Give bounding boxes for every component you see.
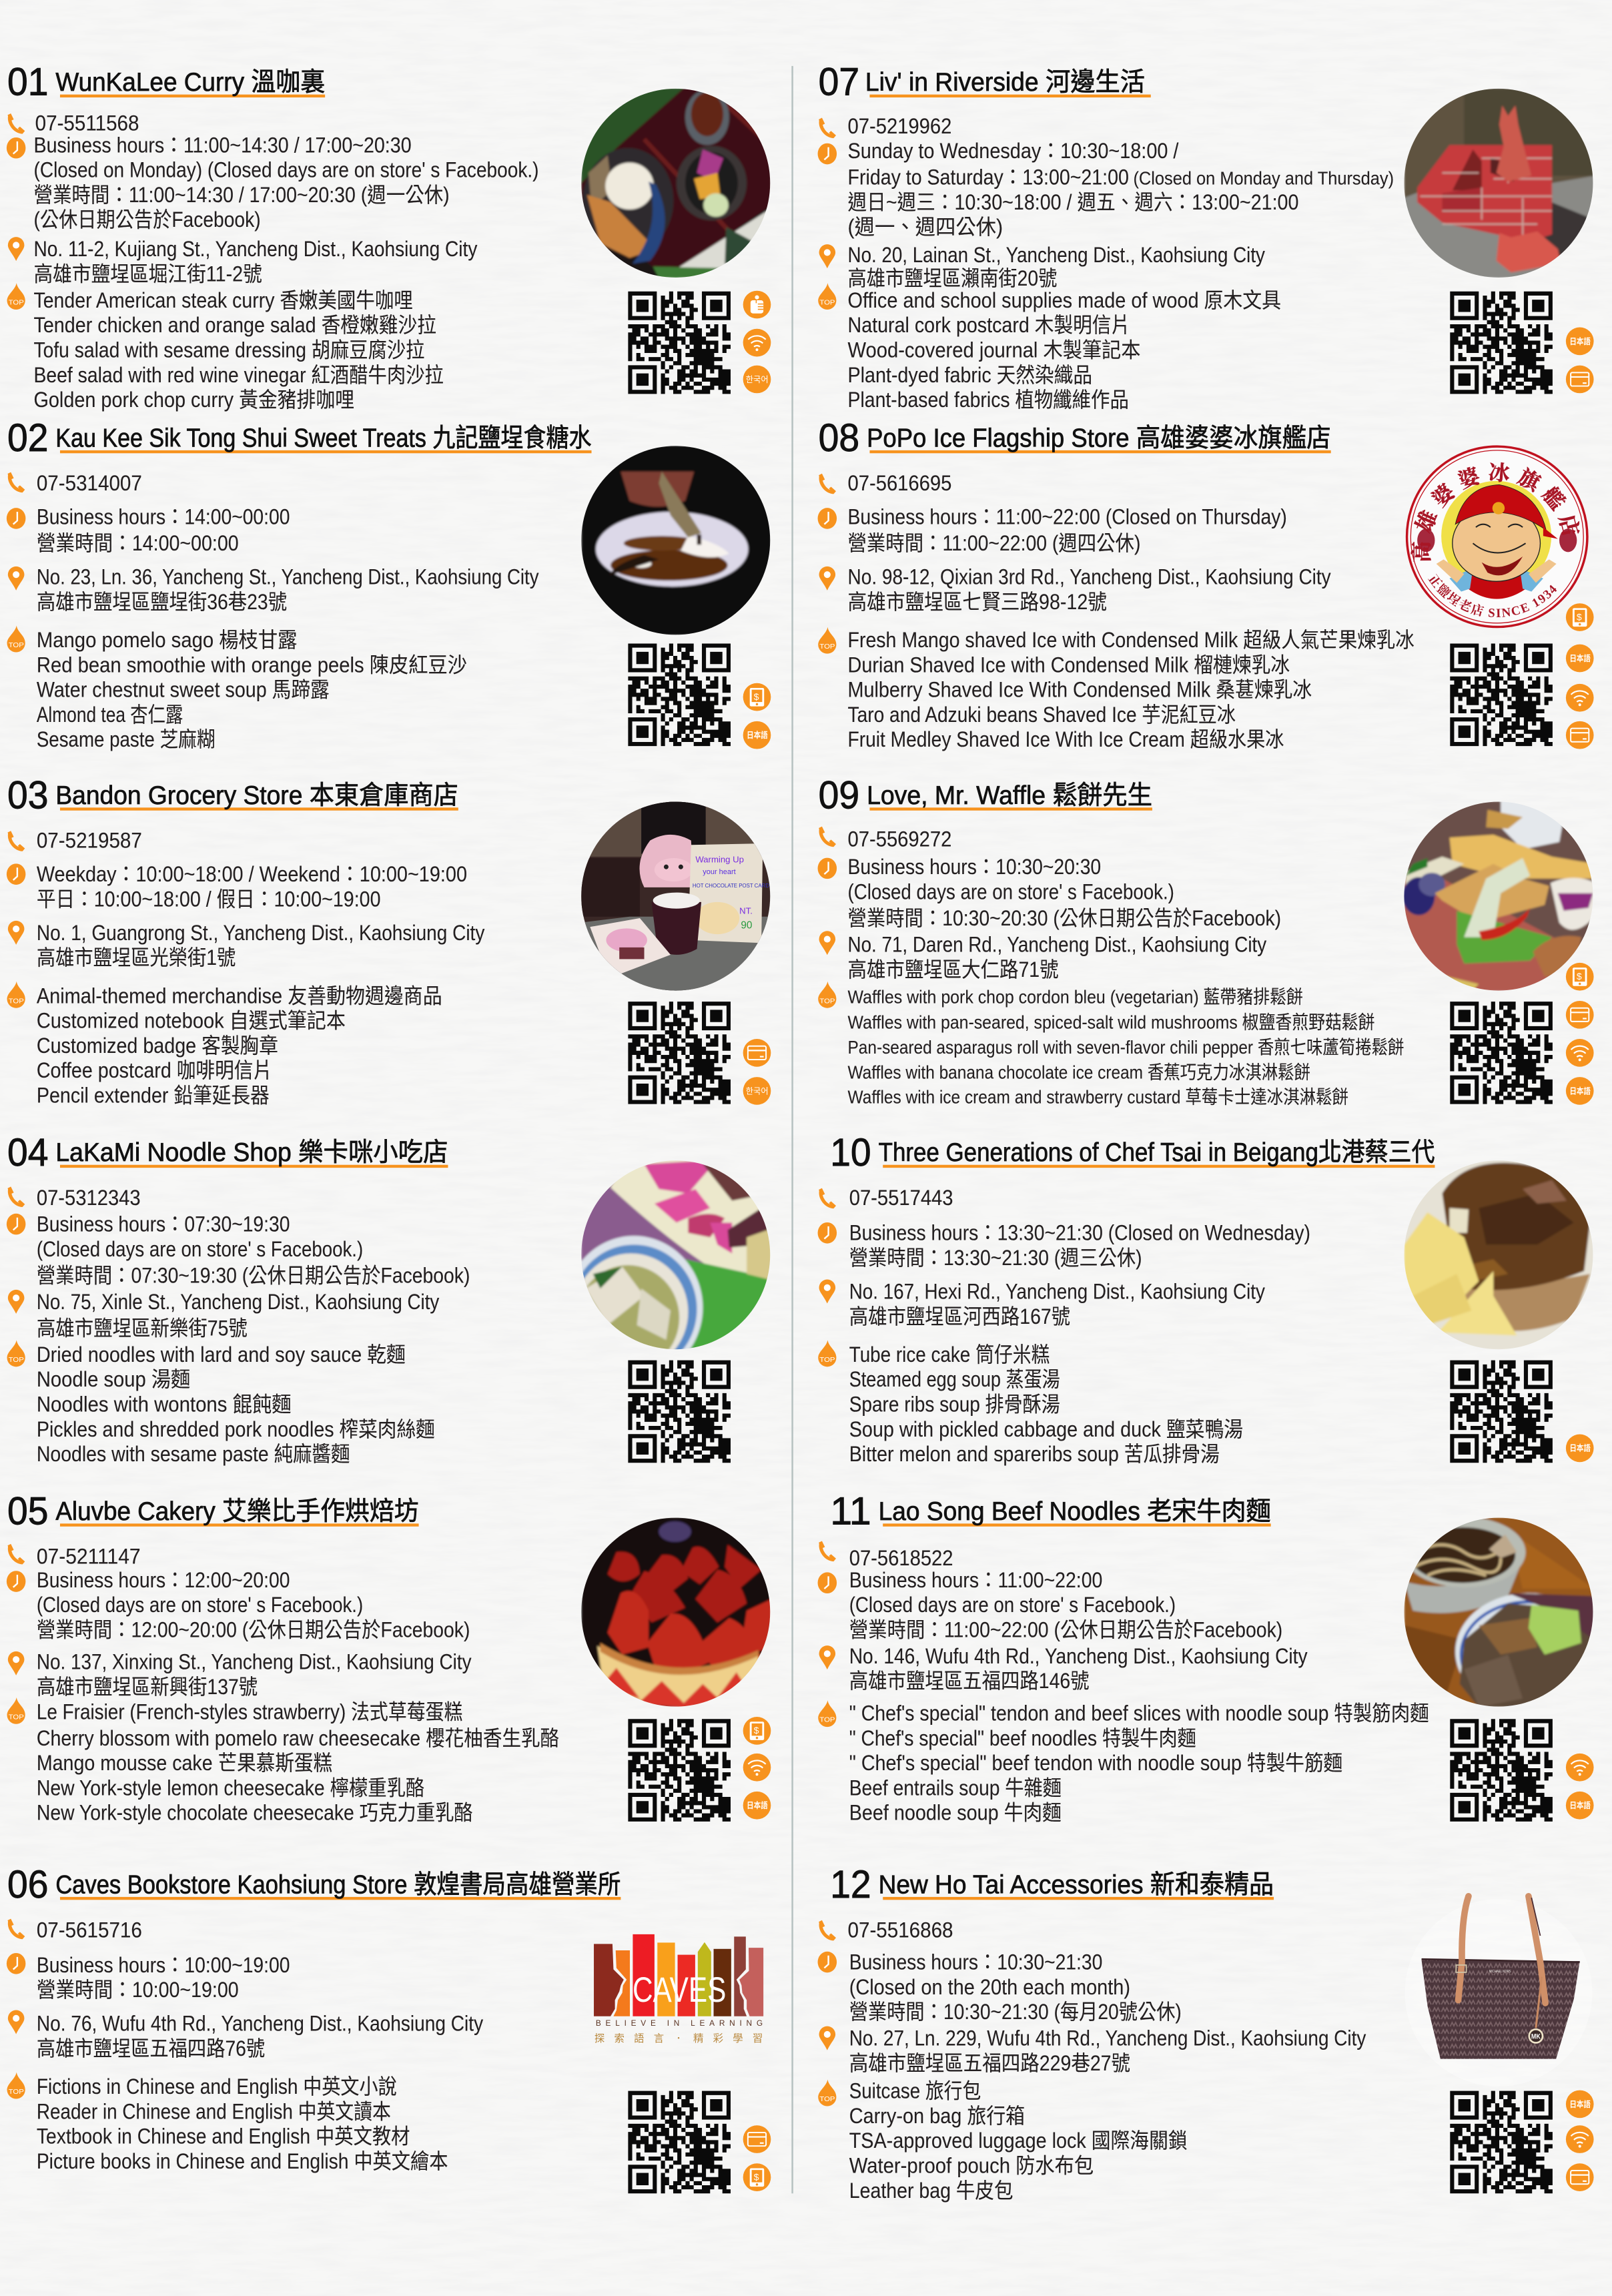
photo: tube rice cake [1404, 1160, 1595, 1350]
top items: New York-style chocolate cheesecake 巧克力重乳酪 [37, 1801, 473, 1825]
address: No. 20, Lainan St., Yancheng Dist., Kaohsiung City [848, 243, 1265, 267]
address: 高雄市鹽埕區堀江街11-2號 [33, 262, 262, 286]
centre divider [791, 66, 793, 2193]
top items: TOP [9, 2088, 24, 2096]
top items [7, 1340, 435, 1466]
address: No. 137, Xinxing St., Yancheng Dist., Kaohsiung City [37, 1650, 472, 1674]
heading 03: 03 [7, 773, 48, 817]
logo: CAVES: CAVES [633, 1970, 726, 2010]
heading 11 [830, 1489, 1271, 1533]
top items: " Chef's special" beef noodles 特製牛肉麵 [849, 1726, 1196, 1750]
logo: CAVES: BELIEVE IN LEARNING [596, 2018, 763, 2028]
business hours: Friday to Saturday：13:00~21:00 [848, 165, 1129, 189]
top items [7, 982, 442, 1107]
qr code [628, 2091, 731, 2193]
business hours [7, 505, 290, 555]
heading 03: Bandon Grocery Store 本東倉庫商店 [55, 781, 458, 810]
heading 06: 06 [7, 1863, 48, 1906]
address [819, 931, 1266, 982]
top items: Customized badge 客製胸章 [37, 1034, 278, 1058]
photo: pig plush and hot chocolate: NT. [739, 905, 753, 915]
service badges [743, 291, 771, 393]
business hours [818, 139, 1394, 239]
heading 08 [819, 416, 1331, 460]
heading 01: 01 [7, 61, 48, 104]
top items [7, 626, 467, 751]
address [819, 243, 1265, 290]
top items: Pan-seared asparagus roll with seven-flavor chili pepper 香煎七味蘆筍捲鬆餅 [848, 1037, 1404, 1058]
panel: 02 Kau Kee Sik [7, 416, 771, 751]
phone: 07-5211147 [37, 1545, 141, 1569]
top items [7, 2072, 448, 2173]
photo: leather handbag [1404, 1896, 1592, 2086]
business hours: Business hours：12:00~20:00 [37, 1568, 290, 1592]
business hours: 營業時間：12:00~20:00 (公休日期公告於Facebook) [37, 1617, 470, 1641]
phone: 07-5219962 [848, 114, 951, 138]
top items: Fruit Medley Shaved Ice With Ice Cream 超級水果冰 [848, 727, 1284, 751]
top items [818, 627, 1415, 751]
top items: Waffles with ice cream and strawberry custard 草莓卡士達冰淇淋鬆餅 [848, 1087, 1348, 1108]
address: 高雄市鹽埕區瀨南街20號 [848, 266, 1057, 290]
qr code [1450, 292, 1553, 394]
business hours: (公休日期公告於Facebook) [33, 208, 261, 232]
heading 05: 05 [7, 1489, 48, 1533]
heading 10 [830, 1131, 1435, 1174]
business hours [7, 862, 467, 911]
address [8, 2010, 483, 2060]
panel: 07 Liv in Riverside [818, 61, 1595, 412]
panel: 12 New Ho Tai [818, 1863, 1594, 2203]
logo: PoPo Ice grandma: 高雄婆婆冰旗艦店 [1410, 462, 1580, 562]
photo: pig plush and hot chocolate: your heart [703, 868, 736, 876]
business hours [818, 1950, 1182, 2024]
photo: beef noodles [1402, 1517, 1602, 1710]
heading 04: 04 [7, 1131, 48, 1174]
service badges: 한국어 [746, 375, 769, 384]
heading 02 [7, 416, 592, 460]
panel: 05 Aluvbe Cakery [7, 1489, 771, 1825]
business hours: (Closed on Monday and Thursday) [1133, 168, 1394, 189]
top items: TOP [9, 998, 24, 1005]
top items: TOP [819, 1717, 835, 1724]
heading 09: 09 [819, 773, 859, 817]
business hours [818, 1568, 1282, 1641]
address [8, 921, 484, 970]
service badges: 日本語 [1569, 336, 1591, 346]
top items: Almond tea 杏仁露 [37, 703, 183, 727]
service badges: 日本語 [1569, 1086, 1591, 1096]
address [8, 237, 477, 286]
top items: Office and school supplies made of wood 原木文具 [848, 288, 1281, 312]
top items [818, 1700, 1429, 1825]
service badges [1566, 2090, 1594, 2191]
business hours: 週日~週三：10:30~18:00 / 週五、週六：13:00~21:00 [848, 190, 1298, 214]
address [819, 565, 1331, 614]
top items: TOP [9, 642, 24, 649]
address [819, 1280, 1265, 1328]
photo: pig plush and hot chocolate: 90 [741, 919, 752, 931]
phone [819, 1541, 953, 1570]
address [8, 1650, 472, 1699]
address: No. 146, Wufu 4th Rd., Yancheng Dist., Kaohsiung City [849, 1644, 1308, 1668]
address: 高雄市鹽埕區鹽埕街36巷23號 [37, 590, 287, 614]
business hours: 營業時間：11:00~22:00 (公休日期公告於Facebook) [849, 1617, 1282, 1641]
photo: pig plush and hot chocolate: Warming Up [695, 855, 744, 865]
heading 09: Love, Mr. Waffle 鬆餅先生 [867, 781, 1152, 810]
business hours: Business hours：11:00~22:00 [849, 1568, 1102, 1592]
heading 04: LaKaMi Noodle Shop 樂卡咪小吃店 [55, 1138, 448, 1167]
service badges [743, 2125, 771, 2191]
heading 02: 02 [7, 416, 48, 460]
business hours: Business hours：07:30~19:30 [37, 1212, 290, 1236]
address: 高雄市鹽埕區七賢三路98-12號 [848, 590, 1107, 614]
photo: leather handbag: MICHAEL KORS [1489, 1970, 1511, 1974]
qr code [1450, 644, 1553, 746]
top items: Mango mousse cake 芒果慕斯蛋糕 [37, 1751, 332, 1775]
panel: 03 Bandon Grocery [7, 773, 771, 1107]
logo: CAVES [594, 1934, 763, 2044]
heading 12: New Ho Tai Accessories 新和泰精品 [879, 1870, 1274, 1899]
top items: Cherry blossom with pomelo raw cheesecake 櫻花柚香生乳酪 [37, 1726, 559, 1750]
business hours: 營業時間：10:30~21:30 (每月20號公休) [849, 2000, 1182, 2024]
panel: 11 Lao Song Beef Noodles [818, 1489, 1602, 1825]
business hours: Weekday：10:00~18:00 / Weekend：10:00~19:00 [37, 862, 467, 886]
business hours [818, 1221, 1310, 1270]
top items: Bitter melon and spareribs soup 苦瓜排骨湯 [849, 1442, 1220, 1466]
service badges [1566, 1434, 1594, 1462]
photo: clay cats on bricks [1404, 88, 1595, 278]
top items: Fictions in Chinese and English 中英文小說 [37, 2074, 397, 2098]
top items: Leather bag 牛皮包 [849, 2179, 1014, 2203]
service badges [1566, 328, 1594, 393]
business hours: (Closed days are on store' s Facebook.) [37, 1237, 363, 1261]
business hours: Sunday to Wednesday：10:30~18:00 / [848, 139, 1179, 163]
panel: 04 LaKaMi [7, 1131, 776, 1466]
heading 12: 12 [830, 1863, 871, 1906]
heading 02: Kau Kee Sik Tong Shui Sweet Treats 九記鹽埕食糖水 [55, 424, 592, 452]
top items: Tofu salad with sesame dressing 胡麻豆腐沙拉 [33, 338, 424, 362]
top items: Mango pomelo sago 楊枝甘露 [37, 628, 297, 652]
top items: Spare ribs soup 排骨酥湯 [849, 1392, 1060, 1416]
top items: Plant-dyed fabric 天然染織品 [848, 363, 1092, 387]
top items: Tender American steak curry 香嫩美國牛咖哩 [33, 288, 413, 312]
photo: waffles [1402, 801, 1596, 992]
address: 高雄市鹽埕區河西路167號 [849, 1304, 1070, 1328]
top items: Plant-based fabrics 植物纖維作品 [848, 388, 1129, 412]
heading 01: WunKaLee Curry 溫咖裏 [55, 68, 325, 97]
top items [818, 283, 1281, 412]
service badges: 日本語 [747, 730, 768, 740]
photo: leather handbag: MK [1531, 2033, 1541, 2041]
business hours: (Closed days are on store' s Facebook.) [848, 879, 1174, 903]
business hours: (Closed days are on store' s Facebook.) [37, 1593, 363, 1617]
qr code [628, 1361, 731, 1463]
top items [818, 982, 1404, 1108]
top items: Steamed egg soup 蒸蛋湯 [849, 1367, 1060, 1391]
top items: Durian Shaved Ice with Condensed Milk 榴槤煉乳冰 [848, 653, 1290, 677]
address: 高雄市鹽埕區新興街137號 [37, 1675, 258, 1699]
service badges: $ [1577, 611, 1582, 622]
qr code [1450, 1361, 1553, 1463]
qr code [628, 1002, 731, 1104]
heading 09 [819, 773, 1152, 817]
address: 高雄市鹽埕區五福四路229巷27號 [849, 2051, 1130, 2075]
phone: 07-5312343 [37, 1186, 141, 1210]
address: No. 75, Xinle St., Yancheng Dist., Kaohsiung City [37, 1290, 439, 1314]
business hours [7, 1568, 470, 1641]
business hours: (週一、週四公休) [848, 215, 1003, 239]
qr code [1450, 2091, 1553, 2193]
top items: Coffee postcard 咖啡明信片 [37, 1058, 272, 1082]
service badges [1566, 603, 1594, 749]
top items: Textbook in Chinese and English 中英文教材 [37, 2125, 410, 2149]
heading 10: 10 [830, 1131, 871, 1174]
panel: 01 WunKaLee Curry [7, 61, 771, 412]
address: No. 27, Ln. 229, Wufu 4th Rd., Yancheng Dist., Kaohsiung City [849, 2026, 1366, 2050]
service badges [1566, 963, 1594, 1105]
service badges: 日本語 [1569, 653, 1591, 663]
top items: Soup with pickled cabbage and duck 鹽菜鴨湯 [849, 1417, 1243, 1441]
panel: 08 PoPo Ice [818, 416, 1594, 751]
phone: 07-5517443 [849, 1186, 953, 1210]
top items: Beef noodle soup 牛肉麵 [849, 1801, 1062, 1825]
panel: 09 Love Mr Waffle [818, 773, 1596, 1108]
logo: PoPo Ice grandma: 正鹽埕老店 SINCE 1934 [1428, 574, 1557, 617]
photo: curry set [581, 88, 771, 278]
business hours: 營業時間：14:00~00:00 [37, 531, 239, 555]
business hours: 營業時間：10:30~20:30 (公休日期公告於Facebook) [848, 906, 1281, 930]
business hours: Business hours：14:00~00:00 [37, 505, 290, 529]
top items: TOP [819, 1357, 835, 1364]
address: 高雄市鹽埕區光榮街1號 [37, 945, 236, 970]
heading 12 [830, 1863, 1274, 1906]
address [819, 2026, 1366, 2075]
service badges: 日本語 [1569, 1800, 1591, 1810]
panel: 10 Chef Tsai [818, 1131, 1595, 1466]
top items: TOP [9, 1357, 24, 1364]
top items: Wood-covered journal 木製筆記本 [848, 338, 1140, 362]
business hours: 營業時間：11:00~14:30 / 17:00~20:30 (週一公休) [33, 183, 450, 207]
business hours: (Closed days are on store' s Facebook.) [849, 1593, 1176, 1617]
heading 01 [7, 61, 325, 104]
top items: Taro and Adzuki beans Shaved Ice 芋泥紅豆冰 [848, 703, 1236, 727]
top items: Customized notebook 自選式筆記本 [37, 1009, 346, 1033]
top items: Reader in Chinese and English 中英文讀本 [37, 2099, 391, 2123]
business hours: Business hours：11:00~14:30 / 17:00~20:30 [33, 133, 412, 157]
heading 08: 08 [819, 416, 859, 460]
address: No. 71, Daren Rd., Yancheng Dist., Kaohsiung City [848, 932, 1266, 956]
qr code [1450, 1002, 1553, 1104]
business hours: Business hours：11:00~22:00 (Closed on Thursday) [848, 505, 1287, 529]
address [8, 1290, 439, 1340]
heading 05 [7, 1489, 419, 1533]
address: No. 76, Wufu 4th Rd., Yancheng Dist., Kaohsiung City [37, 2012, 483, 2036]
top items: Pencil extender 鉛筆延長器 [37, 1083, 270, 1107]
address: No. 1, Guangrong St., Yancheng Dist., Kaohsiung City [37, 921, 484, 945]
top items: TSA-approved luggage lock 國際海關鎖 [849, 2129, 1188, 2153]
top items: Carry-on bag 旅行箱 [849, 2104, 1025, 2128]
top items: Mulberry Shaved Ice With Condensed Milk 桑葚煉乳冰 [848, 678, 1312, 702]
address: 高雄市鹽埕區五福四路146號 [849, 1669, 1090, 1693]
top items: Noodle soup 湯麵 [37, 1367, 190, 1391]
top items: Tender chicken and orange salad 香橙嫩雞沙拉 [33, 313, 436, 337]
top items: New York-style lemon cheesecake 檸檬重乳酪 [37, 1776, 424, 1800]
top items: Animal-themed merchandise 友善動物週邊商品 [37, 984, 442, 1008]
address: 高雄市鹽埕區新樂街75號 [37, 1316, 248, 1340]
service badges: $ [754, 691, 759, 702]
business hours: Business hours：10:00~19:00 [37, 1953, 290, 1977]
business hours: (Closed on the 20th each month) [849, 1975, 1130, 1999]
business hours: 營業時間：13:30~21:30 (週三公休) [849, 1246, 1142, 1270]
heading 07: Liv' in Riverside 河邊生活 [865, 68, 1145, 97]
address: 高雄市鹽埕區五福四路76號 [37, 2036, 265, 2060]
business hours [7, 1953, 290, 2002]
business hours: Business hours：13:30~21:30 (Closed on Wednesday) [849, 1221, 1310, 1245]
heading 07: 07 [819, 61, 859, 104]
heading 05: Aluvbe Cakery 艾樂比手作烘焙坊 [55, 1497, 419, 1526]
photo: strawberry cake [581, 1517, 771, 1710]
service badges [743, 1717, 771, 1820]
service badges [1566, 1754, 1594, 1820]
business hours: 營業時間：07:30~19:30 (公休日期公告於Facebook) [37, 1263, 470, 1287]
address: No. 11-2, Kujiang St., Yancheng Dist., Kaohsiung City [33, 237, 477, 261]
service badges: $ [754, 2172, 759, 2183]
qr code [628, 1719, 731, 1822]
top items: Fresh Mango shaved Ice with Condensed Milk 超級人氣芒果煉乳冰 [848, 628, 1415, 652]
service badges: 日本語 [1569, 2099, 1591, 2109]
heading 08: PoPo Ice Flagship Store 高雄婆婆冰旗艦店 [867, 424, 1331, 452]
top items: Dried noodles with lard and soy sauce 乾麵 [37, 1343, 406, 1367]
top items: Waffles with pork chop cordon bleu (vegetarian) 藍帶豬排鬆餅 [848, 986, 1303, 1007]
top items: Tube rice cake 筒仔米糕 [849, 1343, 1050, 1367]
logo: PoPo Ice grandma [1405, 445, 1589, 629]
top items: Golden pork chop curry 黃金豬排咖哩 [33, 388, 354, 412]
address [8, 565, 539, 614]
top items: Noodles with sesame paste 純麻醬麵 [37, 1442, 350, 1466]
top items: TOP [819, 2096, 835, 2103]
top items: Beef entrails soup 牛雜麵 [849, 1776, 1062, 1800]
panel: 06 Caves Bookstore [7, 1863, 771, 2193]
photo: pig plush and hot chocolate [581, 801, 771, 992]
business hours: Business hours：10:30~21:30 [849, 1950, 1102, 1974]
service badges: $ [1577, 971, 1582, 982]
top items [7, 1697, 559, 1825]
phone: 07-5618522 [849, 1546, 953, 1570]
top items: Noodles with wontons 餛飩麵 [37, 1392, 292, 1416]
address: No. 98-12, Qixian 3rd Rd., Yancheng Dist., Kaohsiung City [848, 565, 1331, 589]
business hours [7, 1212, 470, 1287]
top items: Waffles with banana chocolate ice cream 香蕉巧克力冰淇淋鬆餅 [848, 1062, 1310, 1082]
top items: Water-proof pouch 防水布包 [849, 2154, 1094, 2178]
phone: 07-5569272 [848, 827, 951, 851]
top items: Waffles with pan-seared, spiced-salt wild mushrooms 椒鹽香煎野菇鬆餅 [848, 1012, 1375, 1033]
top items: " Chef's special" tendon and beef slices with noodle soup 特製筋肉麵 [849, 1701, 1429, 1725]
top items: " Chef's special" beef tendon with noodle soup 特製牛筋麵 [849, 1751, 1342, 1775]
top items: TOP [819, 998, 835, 1005]
top items: Pickles and shredded pork noodles 榨菜肉絲麵 [37, 1417, 435, 1441]
photo: sweet soup [581, 445, 771, 635]
business hours: (Closed on Monday) (Closed days are on store' s Facebook.) [33, 158, 539, 182]
top items: Red bean smoothie with orange peels 陳皮紅豆沙 [37, 653, 467, 677]
heading 11: 11 [830, 1489, 871, 1533]
service badges: 日本語 [1569, 1443, 1591, 1453]
top items: Water chestnut sweet soup 馬蹄露 [37, 678, 330, 702]
top items: Natural cork postcard 木製明信片 [848, 313, 1130, 337]
top items: TOP [819, 643, 835, 651]
address: No. 23, Ln. 36, Yancheng St., Yancheng Dist., Kaohsiung City [37, 565, 539, 589]
heading 11: Lao Song Beef Noodles 老宋牛肉麵 [879, 1497, 1271, 1526]
top items [818, 2079, 1188, 2203]
address: No. 167, Hexi Rd., Yancheng Dist., Kaohsiung City [849, 1280, 1265, 1304]
service badges [743, 1039, 771, 1105]
business hours: 平日：10:00~18:00 / 假日：10:00~19:00 [37, 887, 381, 911]
heading 06: Caves Bookstore Kaohsiung Store 敦煌書局高雄營業所 [55, 1870, 621, 1899]
business hours [7, 133, 539, 232]
photo: pig plush and hot chocolate: HOT CHOCOLATE POST CARD [693, 883, 769, 889]
top items: TOP [819, 300, 835, 307]
heading 06 [7, 1863, 621, 1906]
business hours: Business hours：10:30~20:30 [848, 855, 1101, 879]
phone: 07-5219587 [37, 829, 142, 853]
service badges: $ [754, 1725, 759, 1736]
service badges: 日本語 [747, 1800, 768, 1810]
business hours: 營業時間：11:00~22:00 (週四公休) [848, 531, 1140, 555]
business hours [818, 505, 1287, 555]
phone: 07-5615716 [37, 1918, 142, 1942]
top items [7, 283, 444, 412]
phone: 07-5616695 [848, 471, 951, 495]
top items: Suitcase 旅行包 [849, 2079, 981, 2103]
business hours [818, 855, 1281, 930]
qr code [628, 292, 731, 394]
heading 07 [819, 61, 1151, 104]
top items: Sesame paste 芝麻糊 [37, 727, 216, 751]
qr code [628, 644, 731, 746]
photo: noodles and side dishes [581, 1160, 770, 1349]
heading 04 [7, 1131, 448, 1174]
service badges: 한국어 [746, 1086, 769, 1096]
top items: TOP [9, 300, 24, 307]
service badges [743, 683, 771, 749]
top items [818, 1340, 1243, 1466]
address [819, 1644, 1308, 1693]
top items: Le Fraisier (French-styles strawberry) 法式草莓蛋糕 [37, 1699, 462, 1724]
top items: Picture books in Chinese and English 中英文繪本 [37, 2149, 448, 2173]
top items: TOP [9, 1713, 24, 1721]
phone: 07-5314007 [37, 471, 142, 495]
logo: CAVES: 探索語言．精彩學習 [594, 2032, 763, 2044]
qr code [1450, 1719, 1553, 1822]
heading 10: Three Generations of Chef Tsai in Beigang北港蔡三代 [879, 1138, 1435, 1167]
phone: 07-5516868 [848, 1918, 953, 1942]
address: 高雄市鹽埕區大仁路71號 [848, 958, 1059, 982]
top items: Beef salad with red wine vinegar 紅酒醋牛肉沙拉 [33, 363, 444, 387]
phone: 07-5511568 [35, 111, 139, 135]
business hours: 營業時間：10:00~19:00 [37, 1978, 239, 2002]
heading 03 [7, 773, 458, 817]
